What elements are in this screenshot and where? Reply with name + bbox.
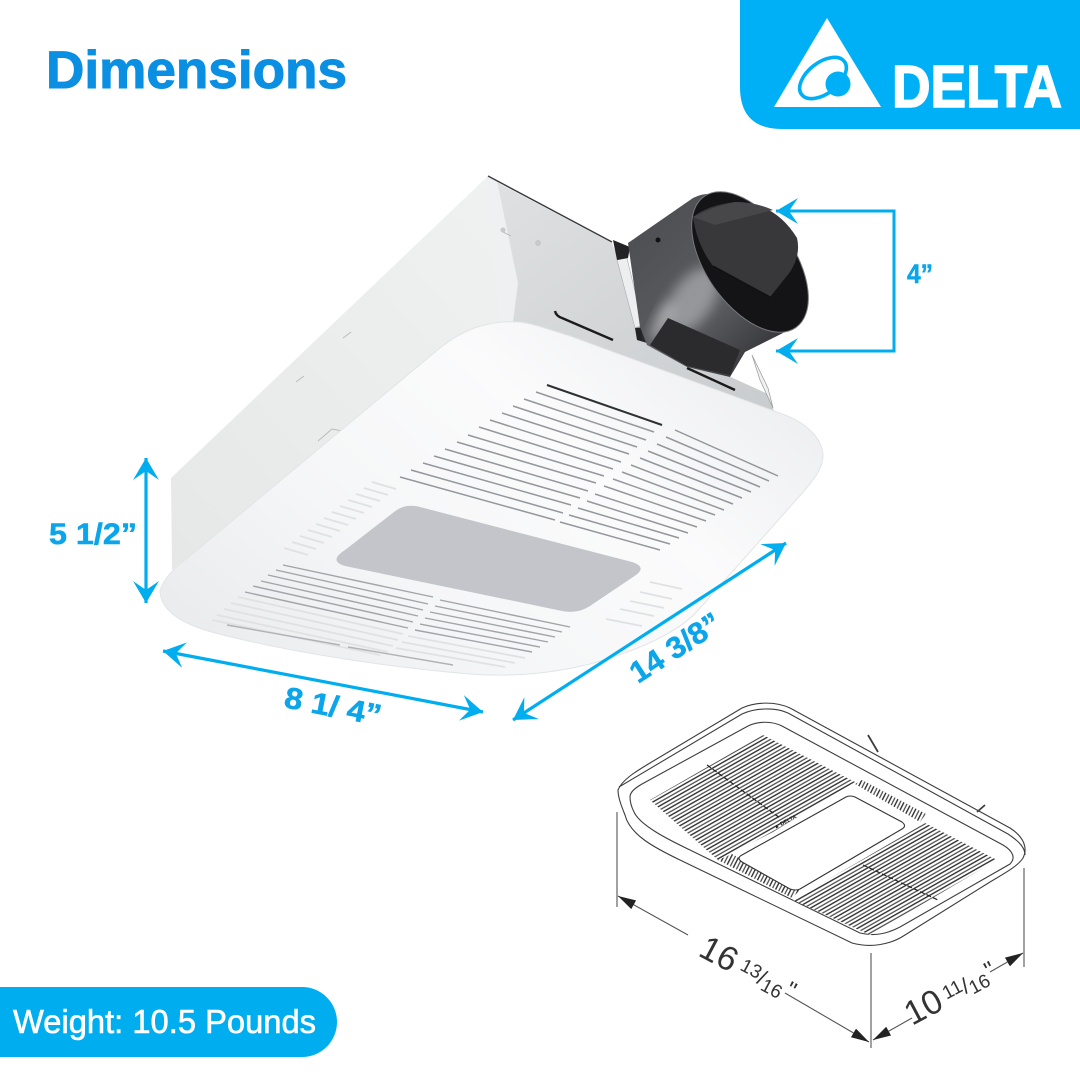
weight badge <box>0 987 337 1057</box>
light lens <box>336 506 641 612</box>
weight badge: Weight: 10.5 Pounds <box>13 1003 316 1040</box>
grille faint grooves <box>212 482 682 667</box>
dimension arrow: 4 inch duct <box>776 211 933 351</box>
label: 16 13/16: " <box>781 977 801 1005</box>
black duct connector <box>628 171 832 377</box>
grille slats upper <box>400 385 778 550</box>
label: 10 11/16: 11 <box>939 976 966 1004</box>
drawing logo mark: ▲ DELTA <box>773 814 798 831</box>
label: 10 11/16: 16 <box>966 971 994 999</box>
label: 5 1/2 inch: 5 1/2” <box>49 518 137 551</box>
housing side <box>171 177 516 570</box>
label: 14 3/8 inch: 14 3/8” <box>624 607 727 690</box>
drawing outlines <box>618 703 1025 945</box>
brand wordmark: DELTA <box>892 54 1062 120</box>
dimension arrows <box>618 896 1023 1042</box>
drawing lens <box>739 796 904 890</box>
label: 16 13/16: 13 <box>737 955 765 984</box>
line drawing with dimensions <box>617 703 1025 1048</box>
label: 16 13/16: 16 <box>757 975 785 1004</box>
label: 10 11/16: " <box>980 956 1000 984</box>
dimension arrow: 14 3/8 inch length <box>513 543 786 720</box>
title: Dimensions <box>46 41 347 100</box>
drawing grille slats <box>650 735 997 935</box>
label: 16 13/16: / <box>753 965 771 991</box>
extension lines <box>617 812 1024 1048</box>
grille slats lower <box>227 565 570 665</box>
icon: delta triangle <box>774 18 881 107</box>
white grille cover <box>160 322 823 675</box>
housing metal back plate <box>296 176 774 441</box>
logo panel <box>740 0 1080 129</box>
label: 10 11/16: / <box>956 973 974 998</box>
label: 8 1/4 inch: 8 1/ 4” <box>282 681 384 733</box>
label: 16 13/16: 16 <box>693 929 744 980</box>
product photo: bath fan <box>160 171 832 675</box>
dimension arrow: 8 1/4 inch width <box>163 651 483 733</box>
label: 10 11/16: 10 <box>898 982 949 1033</box>
label: 4 inch: 4” <box>907 259 933 289</box>
